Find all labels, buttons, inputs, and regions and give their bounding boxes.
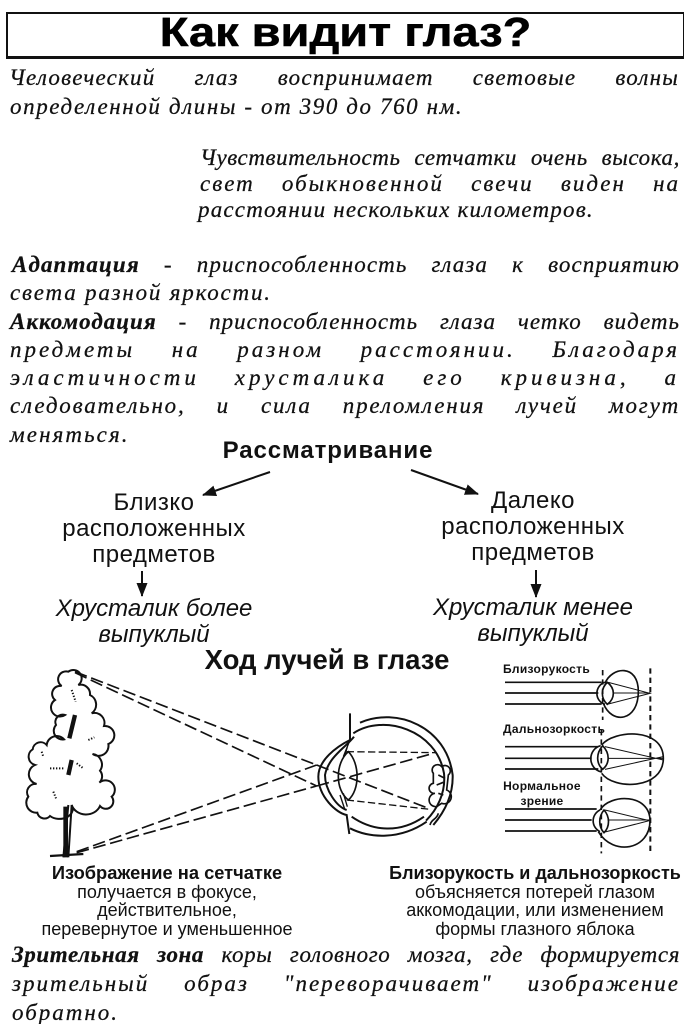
label: myopia: Близорукость <box>503 662 590 676</box>
caption: myopia and hyperopia: аккомодации, или изменением <box>406 900 664 920</box>
text block: wavelengths: определенной длины - от 390 до 760 нм. <box>10 94 463 119</box>
text: near objects: предметов <box>92 541 216 568</box>
rays <box>75 672 437 853</box>
text: far objects <box>441 487 625 566</box>
text block: visual cortex <box>12 942 680 1024</box>
text block: accommodation: следовательно, и сила преломления лучей могут <box>10 393 680 418</box>
caption: myopia and hyperopia: объясняется потерей глазом <box>415 882 655 902</box>
text block: accommodation <box>8 309 680 447</box>
eye: myopia <box>505 671 650 717</box>
text block: wavelengths <box>9 65 679 120</box>
text: lens less convex: Хрусталик менее <box>433 594 633 621</box>
text: lens less convex <box>432 594 633 646</box>
text block: accommodation: эластичности хрусталика его кривизна, а <box>10 365 680 390</box>
caption: myopia and hyperopia <box>389 863 681 939</box>
label: normal vision <box>503 779 581 808</box>
text block: visual cortex: Зрительная зона коры головного мозга, где формируется <box>12 942 680 967</box>
dashed reference lines <box>601 668 650 854</box>
caption: retina image: перевернутое и уменьшенное <box>41 918 293 938</box>
text: far objects: расположенных <box>441 513 625 540</box>
caption: retina image: получается в фокусе, <box>77 882 257 902</box>
heading: ray path: Ход лучей в глазе <box>205 644 449 675</box>
text block: adaptation: света разной яркости. <box>10 280 272 305</box>
text: lens less convex: выпуклый <box>477 620 589 646</box>
icon: eye cross-section <box>318 713 453 836</box>
caption: retina image: Изображение на сетчатке <box>52 862 282 883</box>
text block: retina sensitivity: расстоянии нескольких километров. <box>198 197 594 222</box>
caption: retina image: действительное, <box>97 900 237 920</box>
text block: accommodation: предметы на разном расстоянии. Благодаря <box>10 337 680 362</box>
text: near objects <box>62 489 246 568</box>
text block: retina sensitivity: свет обыкновенной свечи виден на <box>200 171 680 196</box>
caption: myopia and hyperopia: Близорукость и дальнозоркость <box>389 863 681 883</box>
text block: adaptation: Адаптация - приспособленность глаза к восприятию <box>12 252 680 277</box>
text: far objects: предметов <box>471 539 595 566</box>
text block: wavelengths: Человеческий глаз воспринимает световые волны <box>9 65 679 90</box>
icon: tree <box>26 670 115 857</box>
text: near objects: расположенных <box>62 515 246 542</box>
eye: hyperopia <box>505 734 663 784</box>
label: normal vision: зрение <box>520 794 564 808</box>
text block: retina sensitivity: Чувствительность сетчатки очень высока, <box>200 145 680 170</box>
text: lens more convex: выпуклый <box>98 620 210 648</box>
text block: accommodation: меняться. <box>10 422 130 447</box>
title: Как видит глаз? <box>160 9 531 54</box>
label: normal vision: Нормальное <box>503 779 581 793</box>
text block: accommodation: Аккомодация - приспособленность глаза четко видеть <box>10 309 680 334</box>
text: lens more convex: Хрусталик более <box>56 595 252 622</box>
heading: examination: Рассматривание <box>223 437 433 464</box>
label: hyperopia: Дальнозоркость <box>503 722 605 736</box>
text: lens more convex <box>55 595 252 648</box>
eye: normal vision <box>505 799 650 847</box>
text block: retina sensitivity <box>196 145 680 222</box>
caption: retina image <box>41 862 293 939</box>
title <box>6 12 684 59</box>
caption: myopia and hyperopia: формы глазного яблока <box>435 918 635 938</box>
text: far objects: Далеко <box>491 487 575 514</box>
text: near objects: Близко <box>113 489 194 516</box>
text block: visual cortex: зрительный образ "переворачивает" изображение <box>12 971 680 996</box>
text block: adaptation <box>10 252 680 306</box>
